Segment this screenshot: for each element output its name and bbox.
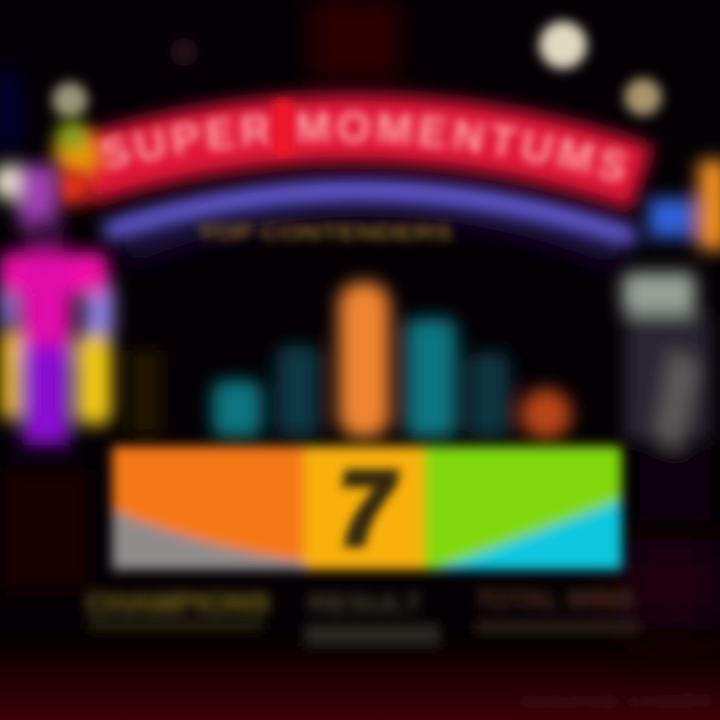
column: center	[305, 588, 440, 646]
footer columns	[86, 584, 640, 646]
left figure	[0, 164, 114, 590]
column: left: CHAMPIONS	[86, 587, 270, 618]
center number: 7	[329, 450, 404, 567]
footer credit: source credit	[520, 693, 711, 710]
column: center: RESULT	[308, 588, 423, 618]
title arch	[40, 80, 664, 274]
subtitle: TOP CONTENDERS	[198, 220, 452, 245]
column: right	[475, 584, 640, 634]
title text: SUPER MOMENTUMS	[95, 104, 632, 188]
column: right: TOTAL WINS	[475, 584, 635, 614]
column: left	[86, 587, 270, 630]
decorative lights	[52, 21, 662, 118]
score panel	[112, 446, 622, 570]
arch band	[54, 121, 642, 250]
right figure	[622, 160, 720, 520]
bar chart	[128, 282, 572, 440]
title divider	[274, 100, 292, 155]
